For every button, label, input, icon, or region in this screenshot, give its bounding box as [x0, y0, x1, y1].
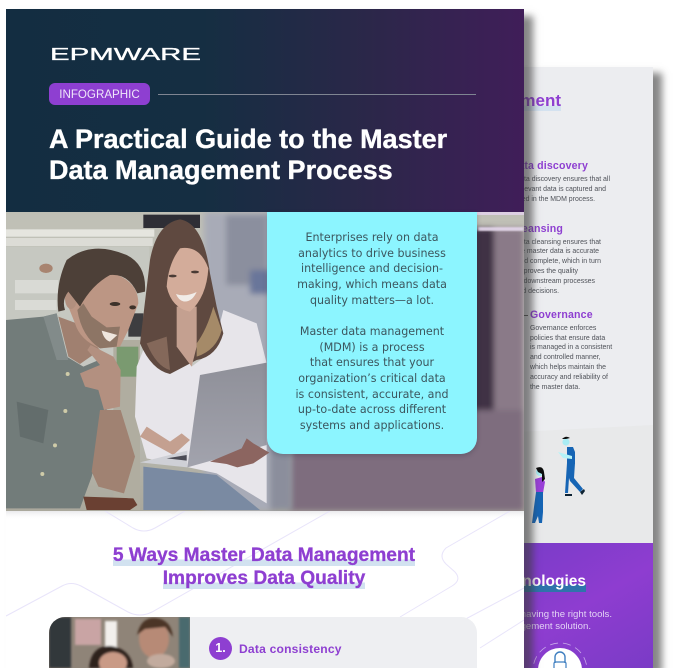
- title: [49, 124, 447, 185]
- intro paragraph 2: systems and applications.: [300, 419, 444, 432]
- item: governance: Governance: [530, 309, 593, 321]
- intro paragraph 1: [297, 231, 447, 307]
- section heading: 5 ways: Improves Data Quality: [163, 568, 365, 589]
- intro paragraph 2: [295, 325, 449, 432]
- intro paragraph 2: organization’s critical data: [298, 372, 446, 385]
- man shirt: [6, 313, 107, 508]
- woman trousers: [143, 467, 260, 510]
- panel: front page: [6, 9, 524, 668]
- woman forearm: [140, 427, 190, 455]
- leather item: [83, 497, 137, 510]
- item: data cleansing: and decisions.: [515, 288, 559, 295]
- item: data discovery: Data discovery ensures that all: [515, 176, 610, 183]
- band heading: Technologies: [487, 573, 586, 590]
- badge: infographic: [49, 83, 150, 105]
- band text second line: data management solution.: [475, 621, 591, 632]
- shelves: [6, 229, 154, 237]
- shirt buttons: [66, 372, 70, 376]
- title: Data Management Process: [49, 155, 393, 185]
- panel: back page: [400, 67, 653, 668]
- intro paragraph 2: is consistent, accurate, and: [295, 388, 449, 401]
- number badge: 1.: [215, 641, 226, 655]
- intro paragraph 2: (MDM) is a process: [319, 341, 425, 354]
- title: A Practical Guide to the Master: [49, 124, 447, 154]
- panel: item card 1: [49, 617, 477, 668]
- item: governance: accuracy and reliability of: [530, 374, 608, 381]
- band text: It starts with having the right tools.: [467, 609, 612, 620]
- decorative line pattern: [6, 511, 524, 648]
- item: data discovery: Data discovery: [511, 160, 588, 172]
- panel: technologies purple band: [400, 543, 653, 668]
- item: data cleansing: improves the quality: [516, 268, 578, 275]
- section heading: 5 ways: 5 Ways Master Data Management: [113, 545, 415, 566]
- item title: Data consistency: [239, 642, 342, 656]
- intro paragraph 2: up-to-date across different: [298, 403, 446, 416]
- item: governance: which helps maintain the: [530, 364, 606, 371]
- right background: [290, 228, 524, 511]
- illustration: two people on grey band: [532, 436, 585, 523]
- concrete column: [204, 212, 292, 511]
- photo: two colleagues with laptop: [6, 212, 524, 511]
- intro paragraph 2: Master data management: [300, 325, 444, 338]
- photo: colleagues in cafe: [49, 617, 190, 668]
- intro paragraph 1: intelligence and decision-: [301, 262, 443, 275]
- icon: lock in circle: [534, 642, 587, 668]
- item: governance: is managed in a consistent: [530, 344, 612, 351]
- woman neck and face: [177, 307, 197, 367]
- item: governance: the master data.: [530, 384, 580, 391]
- intro paragraph 1: analytics to drive business: [298, 247, 446, 260]
- intro paragraph 2: that ensures that your: [310, 356, 434, 369]
- item: data discovery: relevant data is captured and: [517, 186, 606, 193]
- section heading: 5 ways: [113, 545, 415, 589]
- item: governance: and controlled manner,: [530, 354, 601, 361]
- panel: header band: [6, 9, 524, 212]
- back page heading: Data Management: [416, 91, 561, 110]
- item: governance: [524, 309, 612, 391]
- laptop: [187, 363, 267, 467]
- header rule: [158, 94, 476, 95]
- intro paragraph 1: Enterprises rely on data: [305, 231, 439, 244]
- panel: intro text card: [267, 212, 477, 454]
- item: data cleansing: of downstream processes: [516, 278, 595, 285]
- intro paragraph 1: quality matters—a lot.: [310, 294, 434, 307]
- woman hair: [140, 219, 223, 374]
- number badge: [209, 637, 232, 660]
- item: data discovery: used in the MDM process.: [514, 196, 595, 203]
- item: data cleansing: the master data is accurate: [515, 248, 599, 255]
- item: data discovery: [511, 160, 610, 203]
- intro paragraph 1: making, which means data: [297, 278, 447, 291]
- item: data cleansing: and complete, which in turn: [517, 258, 601, 265]
- man arm and hand: [92, 410, 135, 493]
- item: data cleansing: Data cleansing ensures that: [515, 239, 601, 246]
- woman hand: [210, 438, 269, 467]
- item: governance: policies that ensure data: [530, 335, 605, 342]
- man hair: [58, 249, 145, 312]
- item: governance: Governance enforces: [530, 325, 596, 332]
- man neck and face: [58, 317, 100, 364]
- item: data cleansing: [486, 223, 601, 295]
- item: data cleansing: Data cleansing: [486, 223, 563, 235]
- woman blouse: [135, 310, 267, 503]
- badge: infographic: INFOGRAPHIC: [59, 88, 140, 101]
